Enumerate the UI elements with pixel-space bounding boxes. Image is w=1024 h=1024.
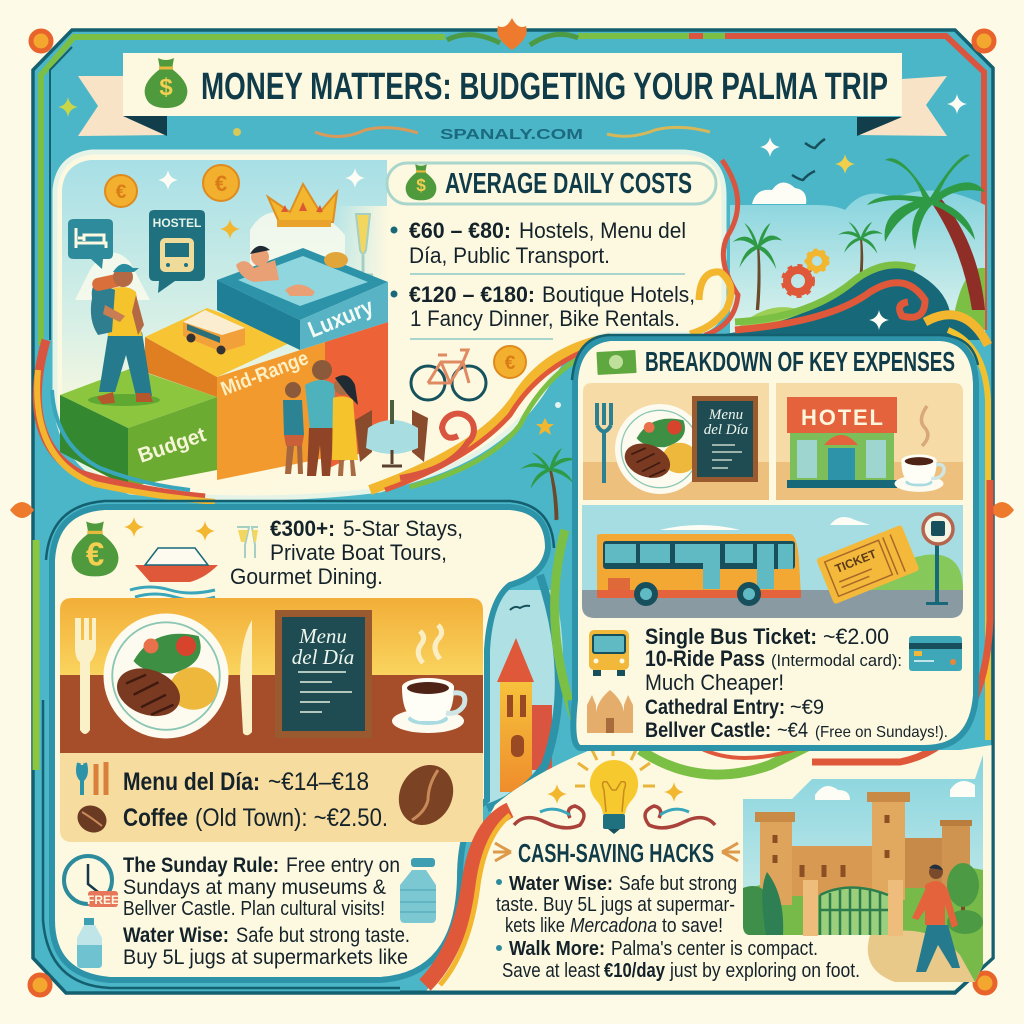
tier: luxury (217, 248, 388, 470)
icon: fork (75, 618, 96, 734)
text block: luxury cost: €300+: (270, 516, 335, 541)
text block: bus fares: Single Bus Ticket: (645, 624, 817, 649)
text block: water wise (123, 924, 410, 969)
icon: ticket: TICKET (833, 546, 879, 576)
tier: mid-range: Mid-Range (218, 347, 312, 401)
tile: menu del día: del Día (704, 422, 748, 438)
tile: bus and ticket (582, 505, 963, 618)
website label: SPANALY.COM (440, 126, 583, 143)
section header: cash-saving hacks: CASH-SAVING HACKS (518, 838, 714, 868)
icon: euro coin (494, 346, 526, 378)
central scenery: palm and bell tower (487, 402, 590, 810)
text block: the sunday rule: Bellver Castle. Plan cultural visits! (123, 898, 385, 920)
text block: walk more hack: €10/day (604, 960, 666, 982)
icon: cutlery small (78, 762, 106, 795)
text block: water wise hack: Safe but strong (619, 873, 737, 895)
illustration: bellver castle scene (743, 755, 983, 982)
text block: attraction prices (645, 696, 948, 742)
text block: the sunday rule: Sundays at many museums & (123, 876, 386, 899)
text block: luxury cost: 5-Star Stays, (343, 516, 463, 541)
title banner (78, 53, 947, 136)
icon: dinner plate (104, 614, 228, 738)
text block: bus fares: 10-Ride Pass (645, 646, 765, 671)
icon: coffee bean large (388, 755, 464, 835)
section header: average daily costs: $ (416, 175, 426, 195)
text block: water wise hack: kets like (505, 915, 565, 937)
text block: luxury cost: Private Boat Tours, (270, 540, 447, 565)
section header: average daily costs (387, 163, 716, 204)
icon: sparkles and birds (760, 94, 967, 330)
icon: big palm fronds (867, 155, 985, 250)
text block: budget cost bullet: €60 – €80: (409, 218, 511, 243)
illustration: family group (283, 360, 358, 476)
text block: mid-range cost bullet: 1 Fancy Dinner, Bike Rentals. (410, 306, 680, 331)
chalkboard: menu del día (275, 610, 372, 738)
icon: gears (783, 250, 828, 296)
illustration: bell tower (497, 638, 552, 792)
icon: front bus (589, 630, 629, 676)
text block: water wise hack: Mercadona (570, 915, 657, 937)
text block: water wise: Buy 5L jugs at supermarkets like (123, 946, 408, 969)
text block: attraction prices: ~€4 (777, 719, 808, 742)
text: menu price: Menu del Día: (123, 768, 260, 796)
illustration: walking person (912, 864, 960, 972)
icon: bed speech bubble (68, 219, 113, 269)
icon: coffee bean small (73, 800, 111, 838)
wave bands (725, 265, 988, 345)
icon: euro money bag (71, 521, 119, 576)
text block: mid-range cost bullet: Boutique Hotels, (542, 282, 695, 307)
icon: clock with free tag: FREE (87, 893, 119, 907)
scroll ornament (488, 552, 530, 605)
tile: menu del día (583, 383, 769, 500)
illustration: restaurant table (355, 400, 428, 466)
panel: breakdown of key expenses (572, 330, 990, 775)
illustration: mini bus (183, 310, 245, 354)
icon: bicycle (411, 350, 486, 400)
text block: attraction prices: Bellver Castle: (645, 719, 771, 742)
illustration: man in hot tub (236, 246, 348, 296)
text block: walk more hack: Walk More: (509, 938, 605, 960)
tile: hotel: HOTEL (801, 405, 883, 430)
text block: attraction prices: (Free on Sundays!). (815, 724, 948, 741)
icons: orange leaf flourishes (493, 843, 740, 861)
tier: budget (60, 368, 217, 487)
panel: cash-saving hacks (400, 738, 993, 992)
icon: water jug (400, 858, 436, 923)
text block: the sunday rule: Free entry on (286, 854, 400, 877)
icon: yacht (130, 548, 218, 600)
text block: bus fares: ~€2.00 (823, 624, 889, 649)
text block: water wise hack: Water Wise: (509, 873, 613, 895)
scenery: sky and palms at top right (725, 94, 988, 345)
text block: walk more hack (496, 938, 860, 982)
food illustration panel (60, 598, 483, 842)
icon: euro money bag: € (86, 535, 104, 572)
text block: water wise hack: taste. Buy 5L jugs at supermar- (496, 894, 735, 916)
text block: attraction prices: ~€9 (790, 696, 824, 719)
banner ribbon tails (78, 76, 947, 136)
text block: walk more hack: Save at least (502, 960, 600, 982)
text block: water wise hack (496, 873, 737, 937)
text block: walk more hack: Palma's center is compact. (611, 938, 818, 960)
decorative rainbow ribbons (37, 160, 738, 502)
tier: mid-range (145, 308, 325, 480)
section header: average daily costs: AVERAGE DAILY COSTS (445, 168, 692, 200)
tile: menu del día: Menu (708, 407, 743, 423)
icon: money bag: $ (159, 74, 173, 101)
icon: champagne glass (353, 214, 373, 275)
icon: crown (268, 184, 337, 227)
text: menu price (123, 768, 369, 796)
text block: mid-range cost bullet: €120 – €180: (409, 282, 535, 307)
icon: gold coins and sparkles (105, 165, 365, 239)
text: menu price: ~€14–€18 (268, 768, 369, 796)
text block: water wise hack: to save! (662, 915, 723, 937)
icon: hostel bus sign (149, 210, 205, 293)
icon: clock with free tag (64, 856, 119, 907)
tier: budget: Budget (135, 423, 209, 468)
icon: cloud (752, 182, 806, 204)
illustration: hiker with backpack (88, 264, 160, 406)
teal ribbons around the tower (487, 530, 590, 808)
icon: gold coins and sparkles: € (116, 182, 127, 203)
text block: mid-range cost bullet (390, 282, 695, 331)
text: coffee price (123, 804, 388, 832)
text block: budget cost bullet: Hostels, Menu del (519, 218, 686, 243)
tier: luxury: Luxury (304, 293, 377, 343)
text block: budget cost bullet: Día, Public Transport. (409, 243, 610, 268)
icon: euro coin: € (505, 353, 516, 374)
icon: hostel bus sign: HOSTEL (153, 216, 201, 230)
text block: bus fares: Much Cheaper! (645, 670, 784, 695)
text block: the sunday rule: The Sunday Rule: (123, 854, 279, 877)
panel: left column budget details (43, 501, 554, 988)
text block: luxury cost (230, 516, 463, 589)
icon: bus (597, 534, 801, 606)
text block: water wise: Water Wise: (123, 924, 229, 947)
icon: gold coins and sparkles: € (215, 171, 227, 196)
icon: transit card (909, 636, 962, 671)
text block: bus fares: (Intermodal card): (771, 651, 902, 670)
icon: cathedral (587, 690, 633, 733)
text: coffee price: Coffee (123, 804, 188, 832)
text: coffee price: (Old Town): ~€2.50. (195, 804, 388, 832)
illustration: light bulb and flourishes (514, 745, 715, 834)
icon: ticket (816, 525, 920, 604)
icon: sparkles and champagne (124, 517, 258, 558)
text block: bus fares (645, 624, 902, 695)
icon: bus stop sign (923, 514, 953, 605)
text block: water wise: Safe but strong taste. (236, 924, 410, 947)
icon: water bottle (77, 918, 102, 968)
icon: money bag (145, 58, 187, 108)
chalkboard: menu del día: Menu (298, 624, 347, 648)
text block: budget cost bullet (390, 218, 686, 268)
icon: knife (240, 620, 252, 735)
text block: luxury cost: Gourmet Dining. (230, 564, 383, 589)
text block: the sunday rule (123, 854, 400, 920)
text block: walk more hack: just by exploring on foot. (669, 960, 860, 982)
text block: attraction prices: Cathedral Entry: (645, 696, 785, 719)
icon: banknote (596, 350, 637, 375)
stepped budget tiers (60, 248, 388, 487)
icon: coffee cup (392, 625, 465, 733)
tile: hotel (776, 383, 963, 500)
chalkboard: menu del día: del Día (292, 645, 354, 669)
panel: average daily costs (37, 152, 738, 502)
